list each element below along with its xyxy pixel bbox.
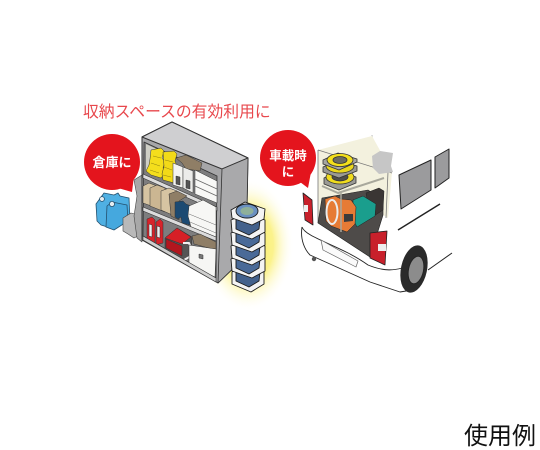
shed body <box>142 122 248 283</box>
top shelf items <box>146 148 217 203</box>
van body <box>302 135 470 290</box>
grey object <box>372 151 393 174</box>
bottom shelf items <box>147 217 216 277</box>
speech bubble: warehouse: 倉庫に <box>92 155 132 170</box>
shelf 2 <box>143 207 216 241</box>
bucket and hose <box>123 213 140 238</box>
windows <box>399 160 431 209</box>
speech bubble: warehouse <box>84 134 140 192</box>
cargo: orange unit <box>325 196 356 232</box>
middle shelf items <box>143 183 216 237</box>
title: 収納スペースの有効利用に <box>83 103 271 121</box>
bumper <box>302 227 402 270</box>
shelf 1 <box>143 174 217 211</box>
tail light right <box>370 231 387 265</box>
cargo: dark box <box>366 188 384 216</box>
speech bubble: vehicle: に <box>282 165 294 179</box>
cargo: teal case <box>353 196 376 227</box>
illustration: van <box>302 135 470 295</box>
speech bubble: vehicle <box>260 130 316 188</box>
caption: 使用例 <box>464 423 536 450</box>
illustration: storage shed <box>96 122 294 311</box>
interior <box>318 136 392 257</box>
shed floor <box>143 236 216 282</box>
icon: stacked reels <box>231 202 265 292</box>
wheel <box>396 243 432 295</box>
tail light left <box>303 193 313 225</box>
cargo frame <box>322 178 384 193</box>
speech bubble: vehicle: 車載時 <box>269 148 307 163</box>
cargo: yellow reels <box>323 153 357 190</box>
water tanks <box>96 193 130 230</box>
yellow glow <box>202 179 294 311</box>
